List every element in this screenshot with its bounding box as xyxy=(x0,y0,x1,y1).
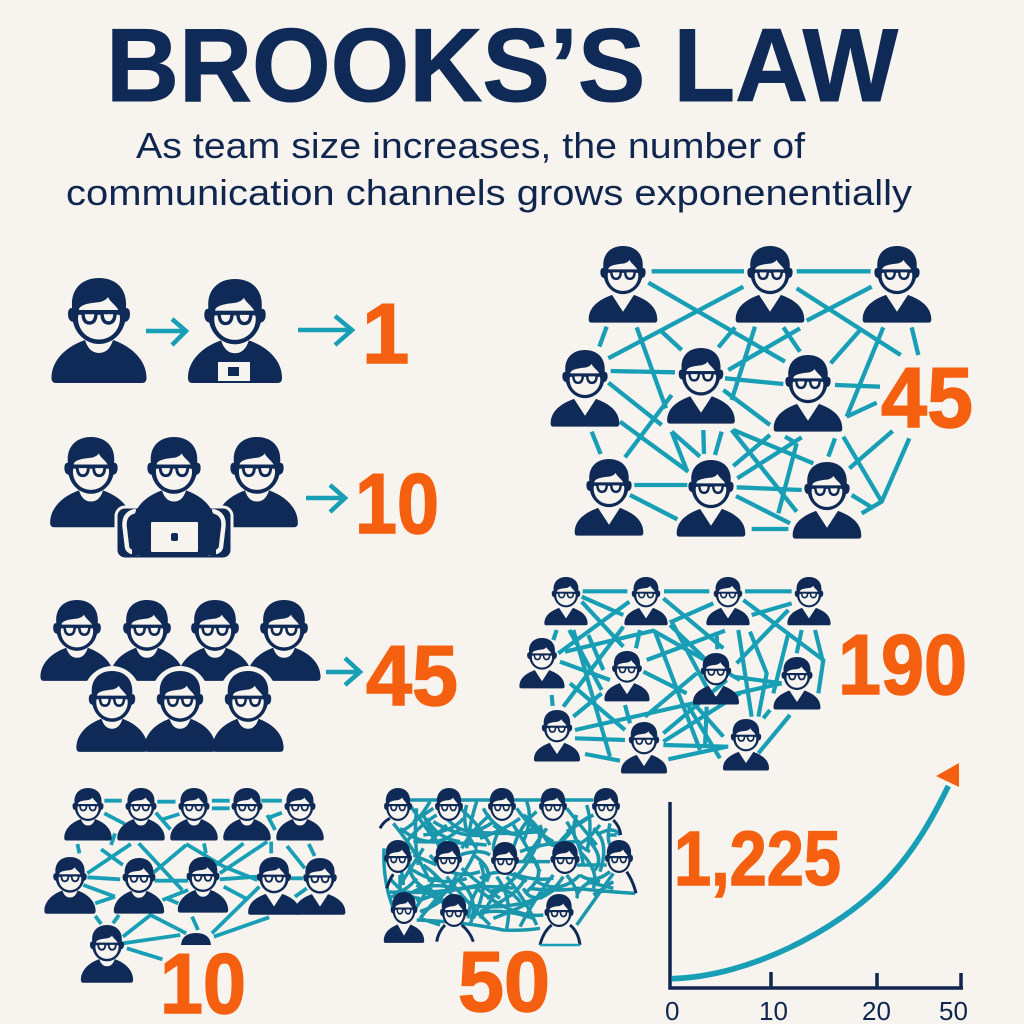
axes and ticks xyxy=(670,802,963,988)
people xyxy=(519,577,831,773)
arrow xyxy=(326,658,360,685)
arrow xyxy=(306,485,345,512)
people, heads with outlined bodies xyxy=(380,788,636,945)
front row of people xyxy=(76,666,284,752)
subtitle: As team size increases, the number of xyxy=(136,125,806,166)
number: 1,225: 1,225 xyxy=(674,816,841,902)
connection lines xyxy=(384,800,635,930)
person with laptop badge xyxy=(188,279,282,383)
panel: three people, 10 channels xyxy=(50,437,439,559)
person xyxy=(52,278,146,383)
panel: network of eleven people, 190 channels xyxy=(519,577,967,773)
people xyxy=(551,246,931,539)
growth curve xyxy=(672,786,948,979)
connection lines xyxy=(77,801,315,959)
arrow to result xyxy=(298,316,352,345)
arrowhead xyxy=(936,763,959,787)
number: 190: 190 xyxy=(838,618,967,713)
back row of people xyxy=(40,600,321,681)
chart: exponential growth curve xyxy=(665,763,968,1024)
subtitle xyxy=(66,125,912,213)
number: 45: 45 xyxy=(881,351,973,446)
panel: dense team network, 10 xyxy=(44,788,345,1024)
panel: network of ten people, 45 channels xyxy=(551,246,973,539)
panel: tangled team network, 50 xyxy=(380,788,636,1024)
connection lines xyxy=(592,271,918,529)
connection lines xyxy=(552,591,823,761)
number: 45: 45 xyxy=(366,629,458,724)
title: BROOKS’S LAW xyxy=(106,8,899,124)
axis labels xyxy=(665,996,968,1024)
people xyxy=(44,788,345,983)
centre person at laptop xyxy=(116,437,232,559)
subtitle: communication channels grows exponenentially xyxy=(66,172,912,213)
panel: two people, 1 channel xyxy=(52,278,409,383)
side people xyxy=(50,437,298,527)
arrow between people xyxy=(146,319,186,345)
number: 1: 1 xyxy=(362,287,409,382)
number: 10: 10 xyxy=(355,457,439,552)
panel: seven people, 45 channels xyxy=(40,600,458,752)
